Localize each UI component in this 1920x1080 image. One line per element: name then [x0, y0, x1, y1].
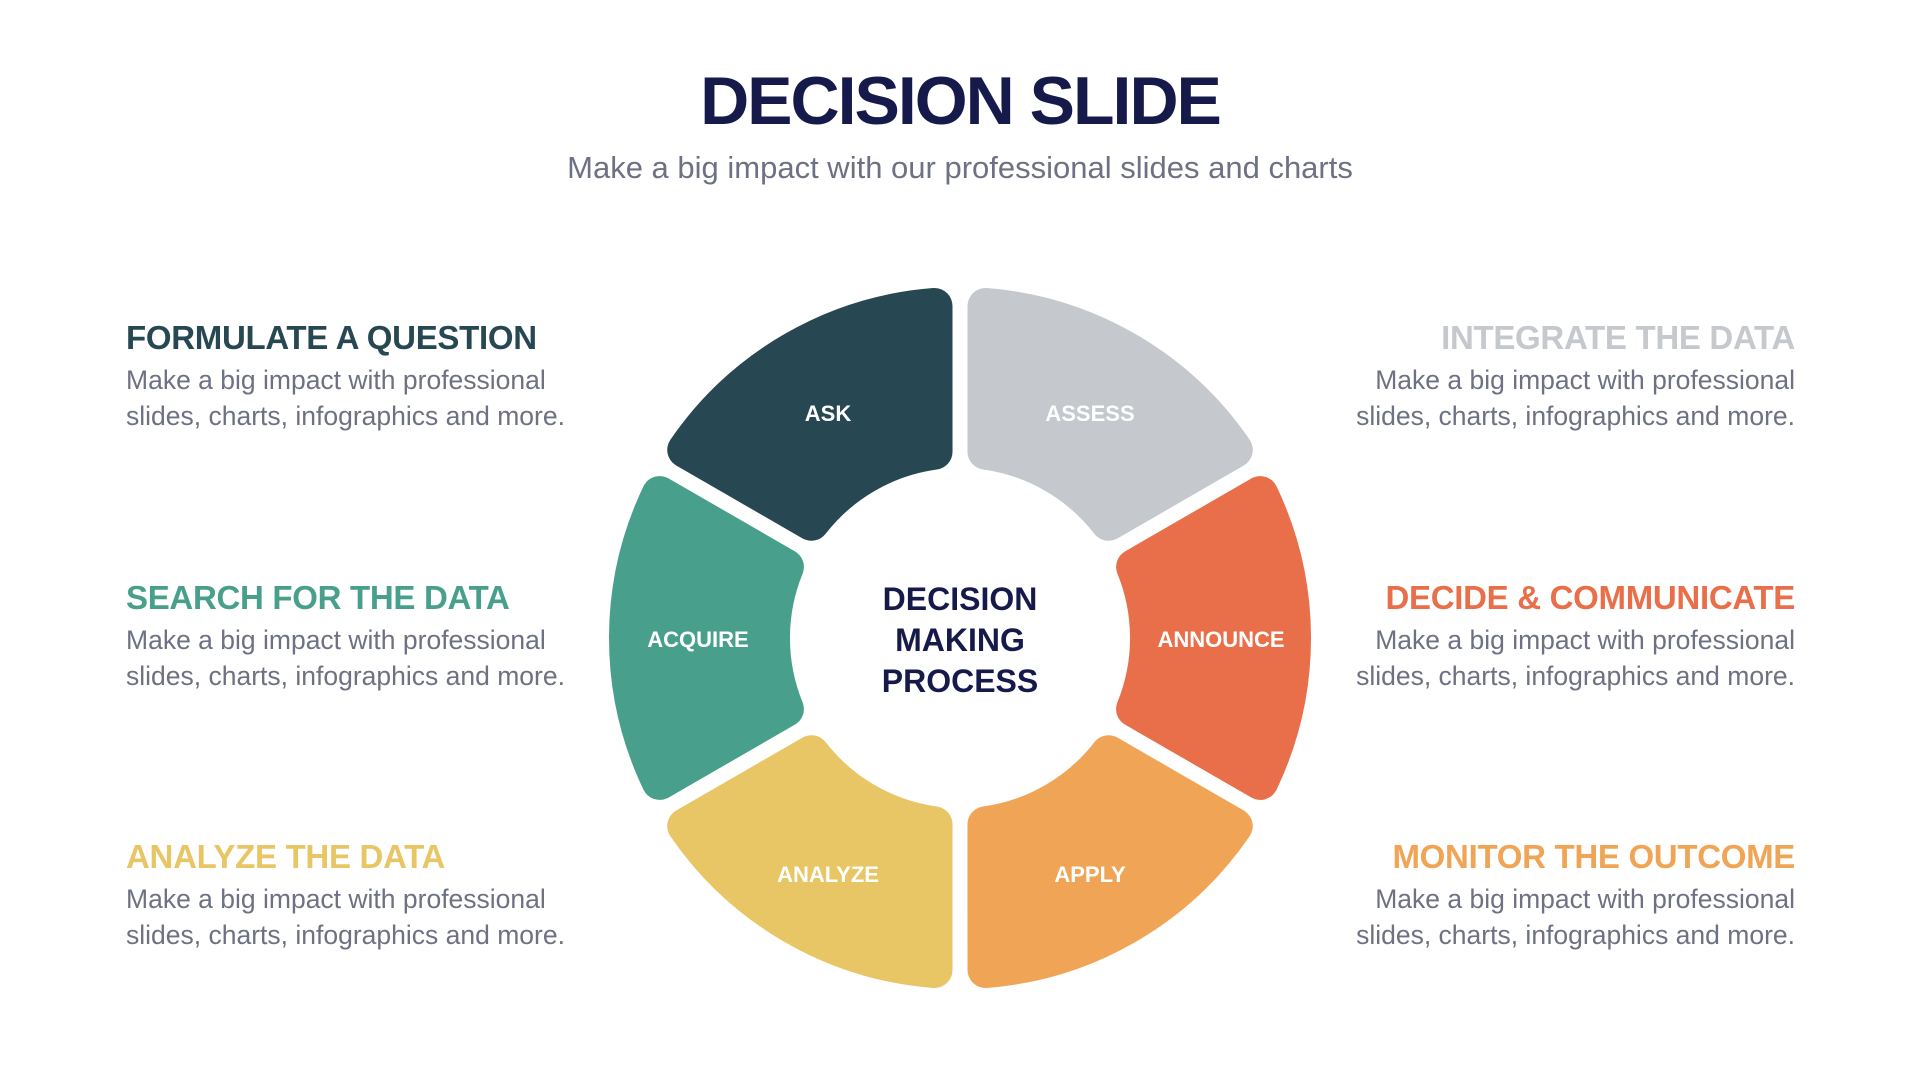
text block: monitor the outcome [1356, 838, 1795, 950]
title: DECISION SLIDE [700, 63, 1220, 139]
segment: ask [685, 234, 998, 558]
subtitle: Make a big impact with our professional slides and charts [567, 150, 1353, 185]
text block: decide & communicate: DECIDE & COMMUNICATE [1385, 579, 1795, 616]
segment: ask: ASK [805, 401, 851, 426]
segment: analyze: ANALYZE [777, 862, 879, 887]
text block: decide & communicate: slides, charts, infographics and more. [1356, 661, 1795, 691]
text block: integrate the data: Make a big impact with professional [1375, 365, 1795, 395]
segment: announce: ANNOUNCE [1157, 627, 1285, 652]
text block: formulate a question [126, 319, 565, 431]
text block: integrate the data [1356, 319, 1795, 431]
segment: acquire: ACQUIRE [647, 627, 749, 652]
text block: decide & communicate: Make a big impact with professional [1375, 625, 1795, 655]
text block: monitor the outcome: Make a big impact with professional [1375, 884, 1795, 914]
segment: announce [1073, 494, 1385, 818]
center label: DECISION [883, 581, 1037, 617]
text block: formulate a question: FORMULATE A QUESTION [126, 319, 537, 356]
segment: analyze [685, 753, 934, 970]
text block: analyze the data: Make a big impact with professional [126, 884, 546, 914]
segment: acquire [535, 458, 847, 782]
text block: analyze the data: slides, charts, infographics and more. [126, 920, 565, 950]
center label: PROCESS [882, 663, 1038, 699]
text block: search for the data [126, 579, 565, 691]
segment: assess [986, 306, 1235, 523]
text block: integrate the data: slides, charts, infographics and more. [1356, 401, 1795, 431]
segment: apply: APPLY [1054, 862, 1126, 887]
text block: analyze the data [126, 838, 565, 950]
center label [882, 581, 1038, 699]
text block: search for the data: Make a big impact with professional [126, 625, 546, 655]
text block: formulate a question: slides, charts, infographics and more. [126, 401, 565, 431]
text block: decide & communicate [1356, 579, 1795, 691]
text block: search for the data: slides, charts, infographics and more. [126, 661, 565, 691]
text block: monitor the outcome: slides, charts, infographics and more. [1356, 920, 1795, 950]
center label: MAKING [895, 622, 1025, 658]
segment: assess: ASSESS [1045, 401, 1135, 426]
text block: analyze the data: ANALYZE THE DATA [126, 838, 445, 875]
segment: apply [922, 718, 1235, 1042]
text block: integrate the data: INTEGRATE THE DATA [1441, 319, 1795, 356]
text block: monitor the outcome: MONITOR THE OUTCOME [1392, 838, 1795, 875]
text block: search for the data: SEARCH FOR THE DATA [126, 579, 510, 616]
text block: formulate a question: Make a big impact with professional [126, 365, 546, 395]
